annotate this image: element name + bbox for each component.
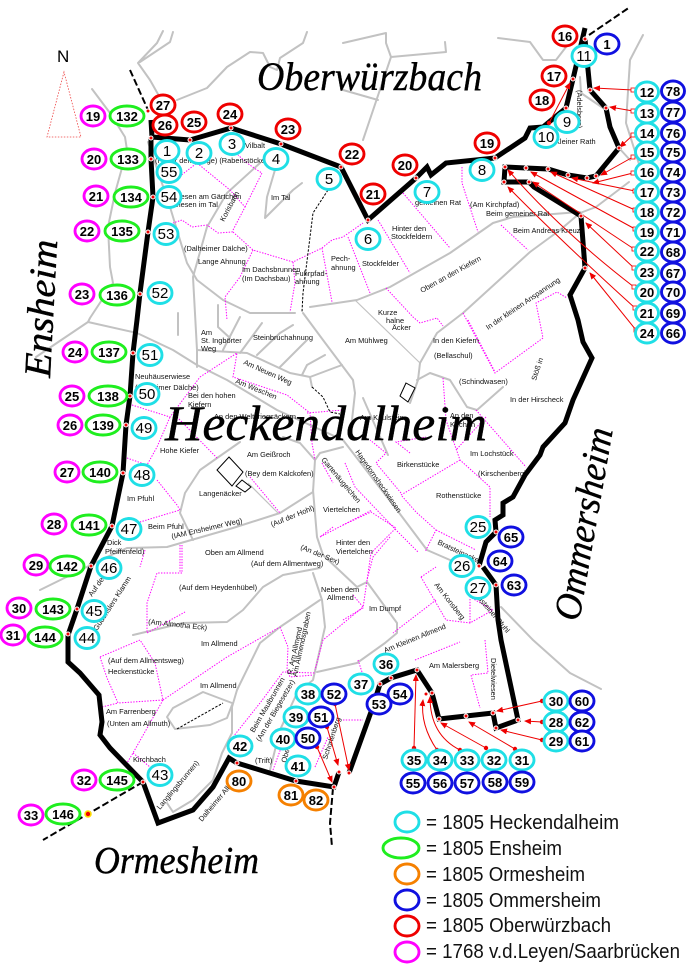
markers: 1805 Oberwürzbach (red): 21 [366, 187, 380, 202]
field name labels: Oben am Allmend [205, 548, 264, 557]
field name labels: Im Dumpf [369, 604, 402, 613]
markers: 1805 Ommersheim (blue): 67 [666, 266, 680, 281]
markers: 1805 Ensheim (green): 132 [116, 109, 138, 124]
field name labels: (Adelsberg) [575, 90, 584, 128]
markers: 1805 Ensheim (green): 145 [106, 773, 128, 788]
markers: 1768 v.d. Leyen / Saarbrücken (magenta) [1, 106, 108, 825]
field name labels: Auf dem [86, 570, 109, 598]
field name labels: In der Hirscheck [510, 395, 564, 404]
markers: 1805 Heckendalheim, large thin numbers (cyan): 51 [142, 347, 158, 364]
markers: 1805 Ommersheim (blue): 61 [575, 734, 589, 749]
markers: 1805 Heckendalheim, bold numbers (cyan): 15 [640, 145, 654, 160]
markers: 1805 Ensheim (green): 134 [120, 190, 143, 205]
field name labels: Dick [107, 538, 122, 547]
markers: 1805 Ensheim (green): 137 [98, 345, 120, 360]
markers: 1805 Heckendalheim, large thin numbers (cyan): 50 [139, 386, 155, 403]
markers: 1805 Heckendalheim, bold numbers (cyan): 29 [549, 734, 563, 749]
markers: 1805 Heckendalheim, large thin numbers (cyan): 45 [86, 603, 102, 620]
markers: 1805 Heckendalheim, bold numbers (cyan): 21 [640, 306, 654, 321]
field name labels: (IAM Ensheimer Weg) [170, 516, 243, 541]
field name labels: Beim gemeiner Rat [486, 209, 549, 218]
neighbour name: Ormesheim: Ormesheim [94, 840, 259, 882]
markers: 1805 Ommersheim (blue): 63 [507, 578, 521, 593]
field name labels: gemeinen Rat [415, 198, 461, 207]
field name labels: Schorlenberg [320, 716, 342, 761]
field name labels: Weg [201, 344, 216, 353]
field name labels: Rothenstücke [436, 491, 481, 500]
markers: 1805 Heckendalheim, bold numbers (cyan): 16 [640, 165, 654, 180]
field name labels: Am Kleinen Allmend [382, 622, 447, 655]
markers: 1805 Heckendalheim, bold numbers (cyan): 17 [640, 185, 654, 200]
legend row: Oberwürzbach: = 1805 Oberwürzbach [426, 915, 611, 937]
field name labels: (Schindwasen) [459, 377, 508, 386]
markers: 1805 Heckendalheim, bold numbers (cyan): 37 [354, 677, 368, 692]
markers: 1805 Ensheim (green): 143 [42, 602, 64, 617]
markers: 1768 v.d. Leyen / Saarbrücken (magenta): 30 [12, 601, 26, 616]
field name labels: Am Mühlweg [345, 336, 388, 345]
field name labels: Birkenstücke [397, 460, 439, 469]
field name labels: (Am Almotha Eck) [148, 617, 208, 632]
markers: 1805 Heckendalheim, bold numbers (cyan) [228, 82, 658, 776]
markers: 1768 v.d. Leyen / Saarbrücken (magenta): 25 [65, 389, 79, 404]
field name labels: Neben dem [321, 585, 359, 594]
markers: 1805 Ommersheim (blue): 71 [666, 225, 680, 240]
markers: 1805 Ommersheim (blue): 1 [603, 37, 611, 52]
markers: 1768 v.d. Leyen / Saarbrücken (magenta): 19 [86, 109, 100, 124]
field name labels: Am Neuen Weg [242, 358, 293, 387]
markers: 1805 Heckendalheim, large thin numbers (cyan): 3 [228, 136, 236, 153]
markers: 1805 Heckendalheim, bold numbers (cyan): 38 [301, 687, 315, 702]
markers: 1768 v.d. Leyen / Saarbrücken (magenta): 22 [80, 224, 94, 239]
markers: 1805 Ommersheim (blue): 58 [488, 775, 502, 790]
field name labels: (Am Kirchpfad) [470, 200, 519, 209]
markers: 1805 Ommersheim (blue): 65 [504, 530, 518, 545]
markers: 1805 Heckendalheim, bold numbers (cyan): 18 [640, 205, 654, 220]
legend row: Ensheim: = 1805 Ensheim [426, 838, 562, 860]
black dashed paths [177, 190, 340, 729]
markers: 1805 Ormesheim (orange) [227, 771, 328, 810]
markers: 1805 Heckendalheim, large thin numbers (cyan): 1 [163, 143, 171, 160]
markers: 1805 Ommersheim (blue): 56 [433, 776, 447, 791]
markers: 1805 Ommersheim (blue): 72 [666, 205, 680, 220]
field name labels: Am Allmendsgraben [290, 611, 313, 677]
field name labels: (Hinter dem Wege) (Rabenstöcke) [155, 156, 267, 165]
field name labels: Vilbalt [245, 141, 265, 150]
markers: 1805 Ensheim (green): 146 [52, 807, 74, 822]
markers: 1805 Heckendalheim, large thin numbers (cyan): 7 [423, 184, 431, 201]
markers: 1768 v.d. Leyen / Saarbrücken (magenta): 20 [87, 152, 101, 167]
field name labels: Kirchen [450, 420, 475, 429]
field name labels: ahnung [295, 277, 320, 286]
markers: 1805 Ommersheim (blue): 50 [301, 731, 315, 746]
markers: 1805 Ommersheim (blue) [296, 34, 684, 793]
field name labels: Bratsteinacker [436, 538, 483, 566]
legend [383, 812, 680, 963]
markers: 1805 Oberwürzbach (red) [151, 26, 577, 204]
markers: 1805 Ensheim (green): 140 [89, 465, 111, 480]
markers: 1805 Ommersheim (blue): 60 [575, 694, 589, 709]
markers: 1805 Ommersheim (blue): 78 [666, 84, 680, 99]
markers: 1805 Ensheim (green): 133 [117, 152, 139, 167]
markers: 1805 Heckendalheim, large thin numbers (cyan): 44 [79, 630, 95, 647]
field name labels: (Dalheimer Dälche) [184, 244, 248, 253]
field name labels: Im Allmend [201, 639, 238, 648]
field name labels: (Auf der Hohl) [269, 503, 315, 529]
markers: 1805 Heckendalheim, large thin numbers (cyan): 2 [195, 145, 203, 162]
field name labels: Am Kaulstein [360, 413, 404, 422]
markers: 1805 Heckendalheim, bold numbers (cyan): 39 [289, 710, 303, 725]
markers: 1805 Ormesheim (orange): 81 [284, 788, 298, 803]
field name labels: Wiesen am Gärtchen [172, 192, 241, 201]
field name labels: Hinter den [336, 538, 370, 547]
markers: 1805 Heckendalheim, large thin numbers (cyan): 25 [470, 519, 486, 536]
field name labels: (Trift) [255, 756, 272, 765]
field name labels: (Auf dem Allmentweg) [251, 559, 323, 568]
field name labels: Am [201, 328, 212, 337]
field name labels: Am Weschen [234, 377, 278, 401]
markers: 1805 Ommersheim (blue): 52 [327, 687, 341, 702]
markers: 1805 Ensheim (green): 142 [56, 559, 78, 574]
field name labels: Am Güdenslers Klamm [84, 574, 133, 643]
boundary stone dots [66, 37, 621, 789]
markers: 1805 Ommersheim (blue): 59 [515, 775, 529, 790]
field name labels: Pech- [331, 254, 351, 263]
field name labels: Fuhrpfad- [295, 269, 328, 278]
markers: 1805 Heckendalheim, bold numbers (cyan): 36 [379, 657, 393, 672]
markers: 1805 Ensheim (green): 136 [106, 288, 128, 303]
field name labels: (Bellaschul) [434, 351, 473, 360]
field name labels: Im Allmend [200, 681, 237, 690]
markers: 1805 Oberwürzbach (red): 24 [223, 107, 238, 122]
field name labels: Kirchbach [133, 755, 166, 764]
field name labels: (Dalheimer Dälche) [135, 383, 199, 392]
field name labels: An den [450, 411, 473, 420]
field name labels: Heckenstücke [108, 667, 154, 676]
markers: 1805 Ommersheim (blue): 77 [666, 105, 680, 120]
markers: 1768 v.d. Leyen / Saarbrücken (magenta): 24 [68, 345, 83, 360]
field name labels: Kiefern [188, 400, 211, 409]
parcel boundaries: dotted magenta lines [100, 155, 567, 770]
field name labels: Gartenäugelchen [319, 456, 363, 505]
field name labels: halne [386, 316, 404, 325]
markers: 1805 Heckendalheim, bold numbers (cyan): 40 [276, 732, 290, 747]
markers: 1805 Heckendalheim, bold numbers (cyan): 42 [233, 739, 247, 754]
markers: 1805 Ensheim (green): 138 [97, 389, 119, 404]
field name labels: Im Pfuhl [127, 494, 154, 503]
markers: 1805 Oberwürzbach (red): 16 [558, 29, 572, 44]
field name labels: (Bey dem Kalckofen) [245, 469, 314, 478]
markers: 1805 Heckendalheim, large thin numbers (cyan): 52 [152, 285, 168, 302]
field name labels: Am Geißroch [247, 450, 291, 459]
markers: 1805 Heckendalheim, large thin numbers (cyan): 8 [478, 162, 486, 179]
markers: 1805 Heckendalheim, large thin numbers (cyan): 48 [134, 467, 150, 484]
field name labels: In der kleinen Anspannung [484, 275, 562, 332]
neighbour name: Ommersheim: Ommersheim [547, 424, 622, 624]
markers: 1805 Ommersheim (blue): 66 [666, 326, 680, 341]
markers: 1805 Heckendalheim, bold numbers (cyan): 28 [549, 715, 563, 730]
field name labels: Äcker [392, 323, 411, 332]
markers: 1805 Ommersheim (blue): 75 [666, 145, 680, 160]
markers: 1805 Heckendalheim, large thin numbers (cyan): 26 [454, 558, 470, 575]
markers: 1805 Heckendalheim, bold numbers (cyan): 14 [640, 126, 655, 141]
markers: 1805 Ommersheim (blue): 76 [666, 126, 680, 141]
red connector arrows [317, 83, 636, 782]
markers: 1768 v.d. Leyen / Saarbrücken (magenta): 31 [6, 628, 20, 643]
field name labels: Korisbach [218, 190, 241, 223]
markers: 1805 Heckendalheim, large thin numbers (cyan): 49 [136, 420, 152, 437]
legend row: Heckendalheim: = 1805 Heckendalheim [426, 812, 619, 834]
field name labels: In den Kiefern [433, 336, 479, 345]
field name labels: Stöß in [529, 357, 545, 382]
markers: 1805 Heckendalheim, bold numbers (cyan): 23 [640, 265, 654, 280]
markers: 1805 Heckendalheim, large thin numbers (cyan): 10 [538, 129, 554, 146]
field name labels: (Unten am Allmuth) [107, 719, 170, 728]
field name labels: Beim Andreas Kreuz [513, 226, 581, 235]
markers: 1805 Ommersheim (blue): 54 [393, 687, 408, 702]
markers: 1805 Ommersheim (blue): 69 [666, 306, 680, 321]
markers: 1805 Ensheim (green) [28, 106, 148, 824]
markers: 1805 Oberwürzbach (red): 27 [156, 98, 170, 113]
field name labels: Neuhäuserwiese [135, 372, 190, 381]
field name labels: Hohe Kiefer [160, 446, 200, 455]
markers: 1805 Heckendalheim, bold numbers (cyan): 24 [640, 326, 655, 341]
markers: 1805 Heckendalheim, large thin numbers (cyan): 27 [470, 580, 486, 597]
markers: 1805 Heckendalheim, large thin numbers (cyan): 6 [364, 231, 372, 248]
markers: 1805 Ommersheim (blue): 64 [493, 554, 508, 569]
field name labels: (Im Dachsbau) [242, 274, 290, 283]
markers: 1805 Heckendalheim, large thin numbers (cyan): 43 [152, 767, 168, 784]
markers: 1768 v.d. Leyen / Saarbrücken (magenta): 23 [75, 287, 89, 302]
field name labels: (Kirschenberg) [478, 469, 526, 478]
markers: 1805 Heckendalheim, bold numbers (cyan): 41 [291, 759, 305, 774]
markers: 1805 Ommersheim (blue): 51 [314, 710, 328, 725]
north arrow [47, 47, 81, 137]
field name labels: Im Tal [271, 193, 291, 202]
field name labels: R. Am Allmend [285, 626, 304, 675]
field name labels: (Am der Biegesetzer) [254, 678, 297, 743]
markers: 1805 Heckendalheim, bold numbers (cyan): 22 [640, 244, 654, 259]
markers: 1768 v.d. Leyen / Saarbrücken (magenta): 21 [89, 189, 103, 204]
markers: 1805 Heckendalheim, bold numbers (cyan): 35 [407, 753, 421, 768]
markers: 1805 Heckendalheim, large thin numbers (cyan): 55 [161, 164, 177, 181]
markers: 1805 Heckendalheim, bold numbers (cyan): 20 [640, 285, 654, 300]
markers: 1805 Ommersheim (blue): 53 [372, 697, 386, 712]
field name labels: Dietelwiesen [489, 658, 498, 700]
markers: 1805 Ommersheim (blue): 70 [666, 285, 680, 300]
markers: 1805 Heckendalheim, large thin numbers (cyan): 5 [325, 171, 333, 188]
field name labels: Bei den hohen [188, 391, 236, 400]
markers: 1805 Ommersheim (blue): 62 [575, 715, 589, 730]
markers: 1805 Heckendalheim, bold numbers (cyan): 33 [460, 753, 474, 768]
field name labels: Pfeiffenfeld) [105, 547, 144, 556]
markers: 1768 v.d. Leyen / Saarbrücken (magenta): 28 [47, 517, 61, 532]
markers: 1805 Oberwürzbach (red): 19 [480, 136, 494, 151]
markers: 1805 Ormesheim (orange): 80 [232, 774, 246, 789]
field name labels: An den Weltkriegsäckern [214, 412, 296, 421]
buildings [217, 383, 415, 492]
markers: 1805 Heckendalheim, bold numbers (cyan): 32 [487, 753, 501, 768]
legend row: Ommersheim: = 1805 Ommersheim [426, 890, 601, 912]
markers: 1805 Ommersheim (blue): 73 [666, 185, 680, 200]
field name labels: Kleiner Rath [555, 137, 596, 146]
markers: 1768 v.d. Leyen / Saarbrücken (magenta): 27 [60, 465, 74, 480]
field name labels: Stockfeldern [391, 232, 432, 241]
markers: 1805 Heckendalheim, large thin numbers (cyan): 11 [576, 48, 592, 65]
field name labels: Im Dachsbrunnen [242, 265, 300, 274]
markers: 1805 Oberwürzbach (red): 23 [281, 122, 295, 137]
field name labels: (An der Sex) [299, 543, 341, 566]
markers: 1805 Ensheim (green): 141 [78, 518, 100, 533]
field name labels: Wiesen im Tal [172, 200, 218, 209]
markers: 1805 Heckendalheim, bold numbers (cyan): 19 [640, 225, 654, 240]
markers: 1768 v.d. Leyen / Saarbrücken (magenta): 26 [63, 418, 77, 433]
markers: 1805 Oberwürzbach (red): 20 [398, 158, 412, 173]
field name labels: St. Ingbörter [201, 336, 242, 345]
title: Heckendalheim: Heckendalheim [164, 395, 487, 451]
markers: 1805 Heckendalheim, large thin numbers (cyan): 54 [161, 189, 177, 206]
field name labels: Kurze [378, 308, 397, 317]
legend row: Ormesheim: = 1805 Ormesheim [426, 864, 585, 886]
markers: 1805 Heckendalheim, bold numbers (cyan): 31 [515, 753, 529, 768]
markers: 1805 Ensheim (green): 135 [111, 224, 133, 239]
municipal boundary: thick black line [68, 28, 619, 823]
field name labels: Viertelchen [336, 547, 373, 556]
markers: 1805 Ommersheim (blue): 55 [406, 776, 420, 791]
markers: 1805 Oberwürzbach (red): 17 [547, 69, 561, 84]
neighbour name: Oberwürzbach: Oberwürzbach [257, 54, 482, 99]
markers: 1805 Ommersheim (blue): 68 [666, 245, 680, 260]
markers: 1805 Ommersheim (blue): 57 [460, 776, 474, 791]
markers: 1805 Heckendalheim, large thin numbers (cyan): 47 [121, 521, 137, 538]
field name labels: Dalheimer Allee [197, 778, 237, 823]
markers: 1805 Heckendalheim, bold numbers (cyan): 30 [549, 694, 563, 709]
yellow boundary point [85, 811, 91, 817]
field name labels: (Auf dem Allmentsweg) [108, 656, 184, 665]
field name labels [84, 90, 596, 823]
field name labels: Stockfelder [362, 259, 400, 268]
markers: 1805 Heckendalheim, large thin numbers (cyan): 53 [158, 226, 174, 243]
field name labels: Hagedornsheckwiesen [353, 448, 404, 514]
markers: 1805 Heckendalheim, bold numbers (cyan): 13 [640, 106, 654, 121]
markers: 1805 Oberwürzbach (red): 25 [187, 115, 201, 130]
field name labels: (Auf dem Heydenhübel) [179, 583, 257, 592]
field name labels: Beim Maulbrunnen [248, 676, 287, 734]
markers: 1805 Oberwürzbach (red): 22 [345, 147, 359, 162]
field name labels: Viertelchen [323, 505, 360, 514]
field name labels: Am Malersberg [429, 661, 479, 670]
field name labels: Am Farrenberg [106, 707, 156, 716]
markers: 1805 Ormesheim (orange): 82 [309, 793, 323, 808]
field name labels: Hinter den [392, 224, 426, 233]
field name labels: Langenäcker [199, 489, 242, 498]
markers: 1805 Oberwürzbach (red): 18 [535, 93, 549, 108]
markers: 1805 Heckendalheim, bold numbers (cyan): 34 [433, 753, 448, 768]
field name labels: Bradsteiner Pfuhl [468, 586, 512, 635]
markers: 1805 Ommersheim (blue): 74 [666, 165, 681, 180]
markers: 1805 Heckendalheim, large thin numbers (cyan): 46 [101, 560, 117, 577]
field name labels: Oben an den Kiefern [419, 254, 483, 295]
markers: 1805 Heckendalheim, bold numbers (cyan): 12 [640, 85, 654, 100]
field name labels: Lange Ahnung [198, 257, 246, 266]
road network [36, 31, 645, 812]
dashed boundary continuations [43, 7, 630, 847]
field name labels: Allmend [327, 593, 354, 602]
field name labels: Beim Pfuhl [148, 522, 184, 531]
markers: 1768 v.d. Leyen / Saarbrücken (magenta): 29 [29, 558, 43, 573]
markers: 1805 Heckendalheim, large thin numbers (cyan): 9 [563, 114, 571, 131]
markers: 1768 v.d. Leyen / Saarbrücken (magenta): 33 [24, 808, 38, 823]
markers: 1768 v.d. Leyen / Saarbrücken (magenta): 32 [77, 773, 91, 788]
field name labels: Langlingsbrunnen) [155, 759, 201, 811]
field name labels: Steinbruchahnung [253, 333, 313, 342]
field name labels: ahnung [331, 263, 356, 272]
field name labels: Ober [279, 745, 292, 764]
field name labels: Am Konsberg [432, 581, 467, 622]
neighbour name: Ensheim: Ensheim [17, 238, 66, 380]
markers: 1805 Heckendalheim, large thin numbers (cyan): 4 [272, 151, 280, 168]
markers: 1805 Ensheim (green): 144 [34, 630, 57, 645]
north arrow: N [57, 47, 69, 66]
markers: 1805 Heckendalheim, large thin numbers (cyan) [75, 46, 596, 786]
markers: 1805 Oberwürzbach (red): 26 [158, 118, 172, 133]
markers: 1805 Ensheim (green): 139 [92, 418, 114, 433]
field name labels: Im Lochstück [470, 449, 514, 458]
